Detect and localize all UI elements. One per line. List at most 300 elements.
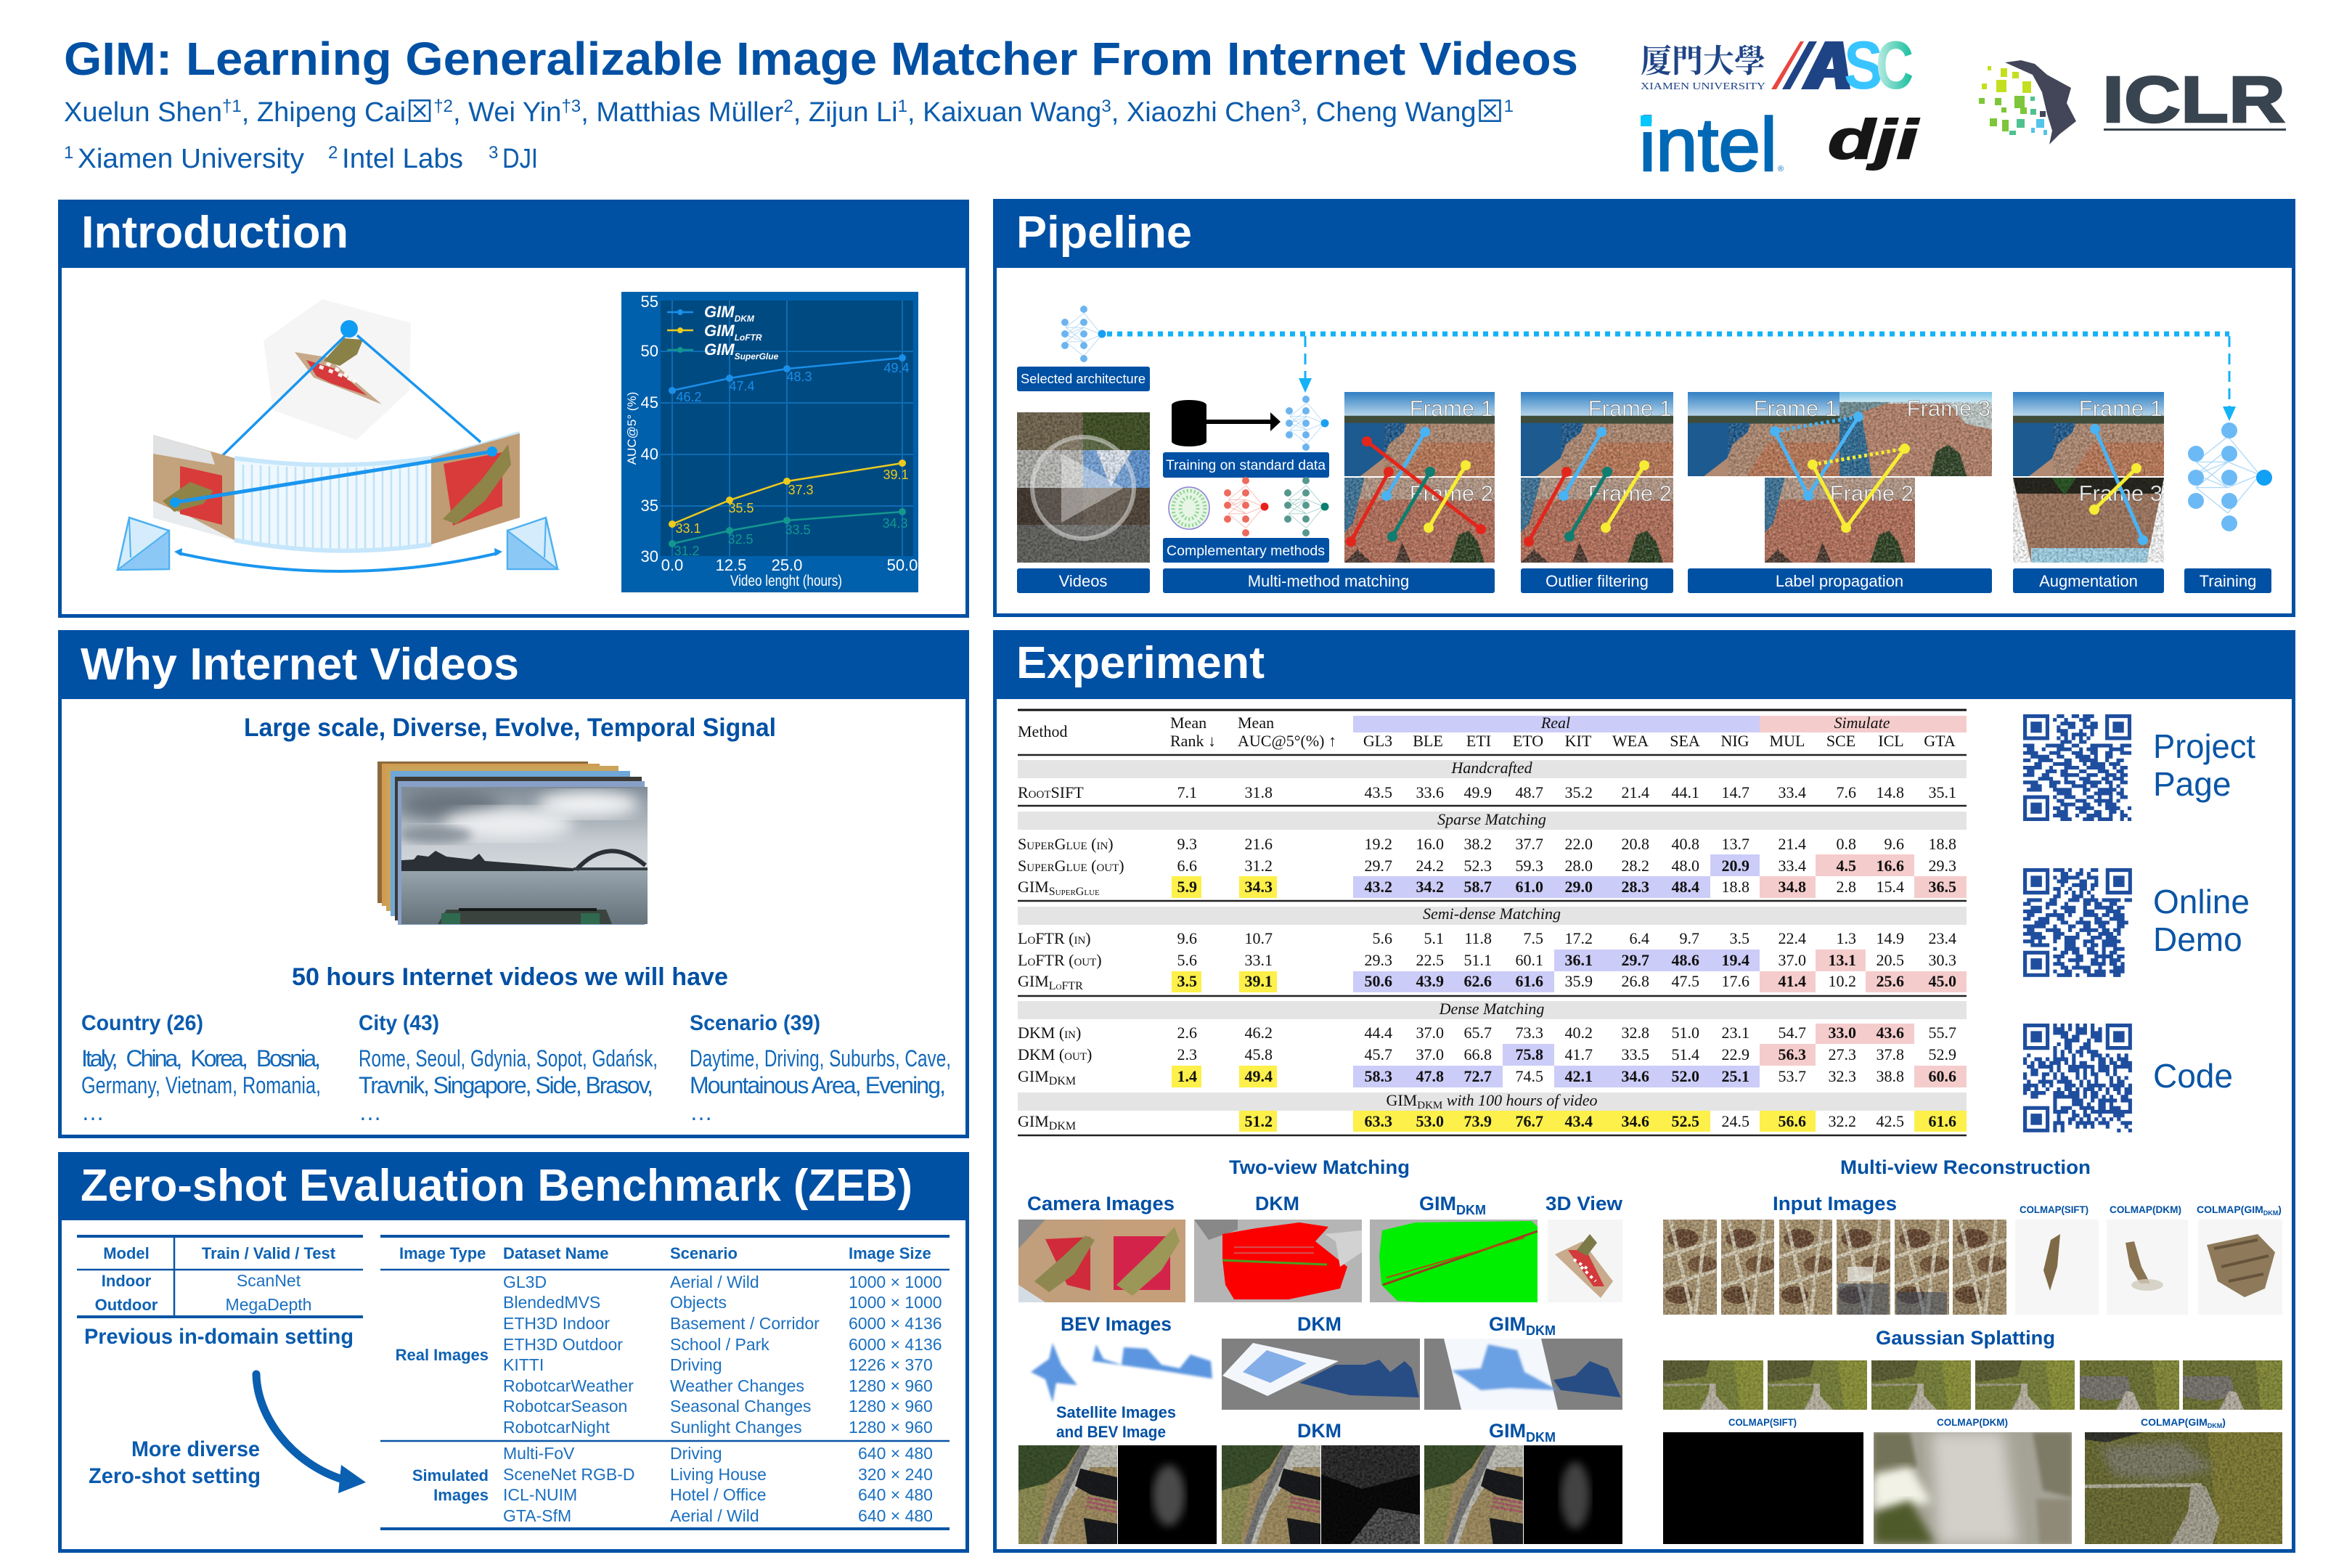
labels: Gaussian splatting methods: [1728, 1416, 2226, 1429]
image: BEV GIM DKM: [1424, 1339, 1622, 1410]
row: DKM out: 41.7: [1565, 1045, 1593, 1063]
row: SuperGlue out: 48.0: [1671, 857, 1699, 875]
row: RootSIFT: 44.1: [1671, 783, 1699, 801]
row: GIM SuperGlue: 28.3: [1622, 878, 1649, 896]
column: Country: Country (26): [81, 1011, 203, 1035]
line chart: AUC vs video length: 30: [641, 547, 658, 565]
table: datasets: Image Size: [849, 1244, 931, 1262]
row: GIM DKM: 58.3: [1365, 1067, 1392, 1085]
row: SuperGlue out: 16.6: [1876, 857, 1904, 875]
frames: augmentation: Frame 1: [2079, 396, 2163, 421]
row: DKM out: 37.8: [1876, 1045, 1904, 1063]
authors: , Cheng Wang⊠: [1301, 97, 1504, 128]
row: SuperGlue out: 6.6: [1177, 857, 1197, 875]
frames: outlier filtering: Frame 1: [1588, 396, 1672, 421]
column labels: BEV: DKM: [1526, 1323, 1556, 1338]
frames: label propagation: Frame 3: [1907, 396, 1990, 421]
table: datasets: 1000 × 1000: [849, 1293, 942, 1312]
logo: Intel: ®: [1778, 165, 1784, 173]
column labels: input images and COLMAP: COLMAP(DKM): [2110, 1204, 2181, 1215]
line chart: AUC vs video length: [621, 292, 918, 592]
series: GIM SuperGlue: 32.5: [727, 532, 754, 547]
row: GIM SuperGlue: SuperGlue: [1049, 886, 1100, 898]
row: SuperGlue in: [1018, 835, 1956, 853]
table: benchmark results: WEA: [1612, 732, 1649, 750]
column: Scenario: Daytime, Driving, Suburbs, Cave,: [690, 1045, 951, 1071]
stage labels: Training: [2200, 572, 2256, 590]
images: Gaussian splatting inputs: [1663, 1360, 2282, 1410]
row: GIM DKM: 49.4: [1244, 1067, 1273, 1085]
stage labels: Videos: [1059, 572, 1107, 590]
row: GIM SuperGlue: 34.8: [1779, 878, 1806, 896]
table: datasets: 640 × 480: [858, 1506, 933, 1525]
frames: label propagation: Frame 2: [1830, 481, 1914, 506]
row: GIM DKM: 34.6: [1622, 1067, 1649, 1085]
heading: Two-view Matching: Two-view Matching: [1229, 1156, 1410, 1178]
heading: Gaussian Splatting: Gaussian Splatting: [1876, 1327, 2055, 1349]
icon: selected architecture network: [1061, 306, 1106, 362]
authors: 1: [898, 97, 907, 116]
line chart: AUC vs video length: 35: [641, 497, 658, 515]
panel: Zero-shot Evaluation Benchmark: [58, 1152, 969, 1551]
row: RootSIFT: 35.1: [1928, 783, 1956, 801]
table: datasets: Multi-FoV: [503, 1444, 575, 1463]
row: GIM LoFTR: [1018, 972, 1956, 992]
column labels: satellite: DKM: [1297, 1420, 1342, 1442]
heading: Pipeline: Pipeline: [1016, 208, 1192, 258]
subheading: qualities: Large scale, Diverse, Evolve, Temporal Signal: [244, 714, 776, 742]
row: GIM DKM: 52.0: [1671, 1067, 1699, 1085]
stage labels: Label propagation: [1776, 572, 1903, 590]
row: GIM SuperGlue: 43.2: [1365, 878, 1392, 896]
line chart: AUC vs video length: Video lenght (hours): [730, 573, 842, 589]
table: previous in-domain setting: [77, 1236, 363, 1317]
row: LoFTR out: 60.1: [1516, 951, 1543, 969]
row: DKM in: 51.0: [1671, 1024, 1699, 1042]
row: DKM out: 75.8: [1516, 1045, 1543, 1063]
logo: ICLR head: [1979, 60, 2076, 144]
row: GIM SuperGlue: 2.8: [1837, 878, 1856, 896]
row: DKM in: 23.1: [1722, 1024, 1749, 1042]
row: DKM in: 65.7: [1463, 1024, 1492, 1042]
QR code: online demo: [2023, 868, 2132, 977]
affiliations: [64, 143, 538, 174]
label: Selected architecture: [1017, 367, 1150, 391]
row: LoFTR in: 22.4: [1779, 929, 1806, 947]
icon: network on standard data: [1286, 396, 1328, 451]
table: benchmark results: Sparse Matching: [1437, 810, 1546, 828]
link label: Online Demo: Demo: [2153, 920, 2242, 958]
QR code: code: [2023, 1024, 2132, 1132]
table: benchmark results: with 100 hours of video: [1442, 1091, 1598, 1109]
table: previous in-domain setting: MegaDepth: [226, 1295, 311, 1314]
column: Country: Germany, Vietnam, Romania,: [81, 1072, 321, 1098]
authors: , Kaixuan Wang: [907, 97, 1101, 128]
image: satellite input: [1018, 1445, 1217, 1544]
row: SuperGlue in: 16.0: [1416, 835, 1444, 853]
table: datasets: Objects: [670, 1293, 727, 1312]
line chart: AUC vs video length: 50.0: [887, 556, 918, 574]
row: GIM LoFTR: 26.8: [1622, 972, 1649, 990]
row: RootSIFT: 35.2: [1565, 783, 1593, 801]
link label: Project Page: Page: [2153, 765, 2231, 803]
column: City: Rome, Seoul, Gdynia, Sopot, Gdańsk,: [359, 1045, 658, 1071]
row: LoFTR in: 9.6: [1177, 929, 1197, 947]
row: GIM DKM 100 hours: 43.4: [1565, 1112, 1593, 1130]
row: LoFTR out: [1018, 951, 1956, 969]
column labels: satellite: GIM: [1489, 1420, 1526, 1442]
row: GIM DKM 100 hours: 42.5: [1876, 1112, 1904, 1130]
labels: Gaussian splatting methods: DKM: [2208, 1422, 2222, 1429]
column: City: [359, 1011, 658, 1125]
line chart: AUC vs video length: 0.0: [661, 556, 683, 574]
row: SuperGlue in: 22.0: [1565, 835, 1593, 853]
table: previous in-domain setting: Outdoor: [95, 1296, 158, 1314]
table: datasets: ICL-NUIM: [503, 1485, 577, 1504]
row: LoFTR in: 5.1: [1424, 929, 1444, 947]
authors: Xuelun Shen: [64, 97, 222, 128]
chart legend: [667, 303, 779, 362]
table: datasets: Hotel / Office: [670, 1485, 767, 1504]
table: datasets: GL3D: [503, 1273, 547, 1291]
row: LoFTR in: 17.2: [1565, 929, 1593, 947]
row: SuperGlue out: 31.2: [1244, 857, 1273, 875]
row: SuperGlue in: 18.8: [1928, 835, 1956, 853]
affiliations: Xiamen University: [78, 144, 304, 174]
series: GIM DKM: 47.4: [729, 379, 755, 393]
table: previous in-domain setting: Train / Valid / Test: [202, 1244, 336, 1262]
table: datasets: Simulated: [412, 1466, 489, 1485]
labels: Gaussian splatting methods: ): [2222, 1416, 2226, 1428]
row: GIM LoFTR: 3.5: [1177, 972, 1197, 990]
row: GIM SuperGlue: 48.4: [1671, 878, 1699, 896]
row: GIM LoFTR: 17.6: [1722, 972, 1749, 990]
images: Sistine ceiling inputs: [1663, 1220, 2006, 1315]
table: benchmark results: Real: [1540, 714, 1570, 732]
row: GIM DKM: GIM: [1018, 1067, 1049, 1085]
row: RootSIFT: 33.4: [1779, 783, 1806, 801]
label: Training on standard data: [1163, 452, 1329, 478]
heading: Why Internet Videos: Why Internet Videos: [81, 640, 519, 690]
line chart: AUC vs video length: 45: [641, 393, 658, 412]
row: GIM DKM: 25.1: [1722, 1067, 1749, 1085]
row: RootSIFT: 21.4: [1622, 783, 1649, 801]
row: DKM out: 22.9: [1722, 1045, 1749, 1063]
authors: 3: [1101, 97, 1111, 116]
label: Selected architecture: Selected architecture: [1021, 372, 1146, 386]
table: benchmark results: AUC@5°(%) ↑: [1238, 732, 1336, 750]
row: LoFTR in: 1.3: [1837, 929, 1856, 947]
column: City: …: [359, 1099, 382, 1125]
column labels: input images and COLMAP: Input Images: [1773, 1193, 1897, 1214]
row: LoFTR out: 33.1: [1244, 951, 1273, 969]
row: SuperGlue in: 13.7: [1722, 835, 1749, 853]
row: SuperGlue out: SuperGlue (out): [1018, 857, 1124, 875]
row: SuperGlue in: SuperGlue (in): [1018, 835, 1114, 853]
stage labels: Augmentation: [2039, 572, 2138, 590]
row: GIM LoFTR: 62.6: [1463, 972, 1492, 990]
row: GIM DKM 100 hours: DKM: [1049, 1120, 1076, 1132]
authors: , Zijun Li: [793, 97, 898, 128]
authors: 1: [1504, 97, 1514, 116]
image: satellite GIM DKM: [1424, 1445, 1622, 1544]
row: LoFTR in: 3.5: [1729, 929, 1749, 947]
table: datasets: Real Images: [396, 1346, 489, 1364]
row: RootSIFT: 7.6: [1837, 783, 1856, 801]
table: benchmark results: Rank ↓: [1170, 732, 1216, 750]
frames: outlier filtering: [1521, 392, 1673, 563]
row: DKM in: DKM (in): [1018, 1024, 1081, 1042]
frames: multi-method matching: Frame 2: [1410, 481, 1493, 506]
series: GIM LoFTR: 37.3: [788, 483, 814, 497]
row: LoFTR out: 20.5: [1876, 951, 1904, 969]
row: GIM LoFTR: LoFTR: [1049, 980, 1083, 992]
table: benchmark results: BLE: [1413, 732, 1443, 750]
row: LoFTR in: 23.4: [1928, 929, 1956, 947]
column labels: satellite: DKM: [1526, 1430, 1556, 1445]
row: GIM DKM 100 hours: 56.6: [1779, 1112, 1806, 1130]
panel: Introduction: [58, 200, 969, 616]
frames: multi-method matching: Frame 1: [1410, 396, 1493, 421]
series: GIM LoFTR: 33.1: [675, 521, 701, 536]
column labels: BEV: BEV Images: [1061, 1313, 1172, 1335]
row: LoFTR out: 19.4: [1722, 951, 1749, 969]
table: datasets: GTA-SfM: [503, 1506, 571, 1525]
row: LoFTR out: 37.0: [1779, 951, 1806, 969]
row: GIM DKM: 53.7: [1779, 1067, 1806, 1085]
arrow: to zero-shot setting: [256, 1374, 366, 1493]
authors: , Wei Yin: [453, 97, 561, 128]
row: SuperGlue out: 29.7: [1365, 857, 1392, 875]
logo: ASC: [1771, 27, 1914, 103]
column: Scenario: [690, 1011, 951, 1125]
image: COLMAP SIFT render: [1663, 1432, 1863, 1544]
table: benchmark results: Semi-dense Matching: [1423, 905, 1561, 923]
row: DKM in: 43.6: [1876, 1024, 1904, 1042]
row: GIM SuperGlue: 34.2: [1416, 878, 1444, 896]
row: GIM DKM 100 hours: GIM: [1018, 1112, 1049, 1130]
panel: Pipeline: [993, 199, 2295, 616]
row: GIM SuperGlue: 36.5: [1928, 878, 1956, 896]
row: GIM SuperGlue: 34.3: [1244, 878, 1273, 896]
table: datasets: RobotcarSeason: [503, 1397, 627, 1416]
table: benchmark results: Method: [1018, 722, 1067, 740]
table: benchmark results: KIT: [1565, 732, 1592, 750]
row: SuperGlue out: 33.4: [1779, 857, 1806, 875]
row: SuperGlue out: 52.3: [1463, 857, 1492, 875]
row: DKM out: [1018, 1045, 1956, 1063]
row: SuperGlue in: 0.8: [1837, 835, 1856, 853]
images: COLMAP reconstructions: [2015, 1220, 2282, 1315]
affiliations: 3: [489, 143, 498, 163]
series: GIM SuperGlue: 31.2: [674, 544, 700, 558]
authors: , Xiaozhi Chen: [1111, 97, 1291, 128]
caption: more diverse zero-shot setting: [89, 1437, 261, 1488]
labels: Gaussian splatting methods: COLMAP(DKM): [1937, 1416, 2008, 1428]
column labels: input images and COLMAP: COLMAP(SIFT): [2020, 1204, 2088, 1215]
affiliations: 1: [64, 143, 73, 163]
image: camera pair: [1018, 1220, 1185, 1302]
table: benchmark results: Handcrafted: [1450, 759, 1533, 777]
row: LoFTR out: 51.1: [1463, 951, 1492, 969]
row: LoFTR out: 22.5: [1416, 951, 1444, 969]
row: DKM in: 46.2: [1244, 1024, 1273, 1042]
table cell highlights: [1018, 716, 1967, 1132]
row: GIM LoFTR: 39.1: [1244, 972, 1273, 990]
chart legend: DKM: [735, 314, 755, 324]
row: RootSIFT: 7.1: [1177, 783, 1197, 801]
row: GIM DKM: DKM: [1049, 1075, 1076, 1087]
label: Training on standard data: Training on standard data: [1166, 458, 1326, 473]
table: datasets: 320 × 240: [858, 1465, 933, 1484]
link label: Online Demo: [2153, 883, 2250, 958]
row: LoFTR in: 11.8: [1464, 929, 1492, 947]
stage labels: Outlier filtering: [1545, 572, 1649, 590]
row: LoFTR out: 5.6: [1177, 951, 1197, 969]
table: benchmark results: DKM: [1417, 1100, 1442, 1111]
row: DKM in: 54.7: [1779, 1024, 1806, 1042]
row: DKM out: 56.3: [1779, 1045, 1806, 1063]
table: datasets: BlendedMVS: [503, 1293, 600, 1312]
row: GIM DKM: 32.3: [1828, 1067, 1856, 1085]
series: GIM LoFTR: [669, 460, 909, 536]
authors: †3: [561, 97, 581, 116]
table: benchmark results: GTA: [1924, 732, 1956, 750]
row: GIM LoFTR: 35.9: [1565, 972, 1593, 990]
logo: ASC: C: [1876, 27, 1914, 103]
labels: Gaussian splatting methods: COLMAP(SIFT): [1728, 1416, 1797, 1428]
chart legend: SuperGlue: [735, 351, 779, 362]
icon: teal network: [1284, 477, 1328, 536]
row: RootSIFT: 14.8: [1876, 783, 1904, 801]
row: DKM in: 32.8: [1622, 1024, 1649, 1042]
column labels: BEV: GIM: [1489, 1313, 1526, 1335]
chart legend: LoFTR: [735, 332, 762, 343]
row: RootSIFT: 14.7: [1722, 783, 1749, 801]
stage labels: [1017, 568, 2271, 593]
row: SuperGlue out: [1018, 857, 1956, 875]
row: GIM DKM 100 hours: 53.0: [1416, 1112, 1444, 1130]
row: GIM LoFTR: 10.2: [1828, 972, 1856, 990]
row: GIM DKM: 1.4: [1177, 1067, 1197, 1085]
table: datasets: RobotcarWeather: [503, 1376, 634, 1395]
row: GIM DKM 100 hours: 32.2: [1828, 1112, 1856, 1130]
table: datasets: 1280 × 960: [849, 1418, 933, 1437]
column labels: input images and COLMAP: COLMAP(GIM: [2197, 1204, 2263, 1215]
title: GIM: Learning Generalizable Image Matcher From Internet Videos: [64, 33, 1578, 85]
row: SuperGlue out: 24.2: [1416, 857, 1444, 875]
caption: previous in-domain setting: Previous in-domain setting: [84, 1325, 354, 1349]
row: DKM in: 40.2: [1565, 1024, 1593, 1042]
panel: Experiment: [993, 630, 2295, 1551]
row: LoFTR in: 14.9: [1876, 929, 1904, 947]
table: datasets: 1280 × 960: [849, 1397, 933, 1416]
row: GIM DKM: 38.8: [1876, 1067, 1904, 1085]
logo: Xiamen University: XIAMEN UNIVERSITY: [1641, 81, 1765, 92]
frames: augmentation: [2013, 392, 2164, 563]
row: SuperGlue out: 20.9: [1722, 857, 1749, 875]
authors: 2: [783, 97, 793, 116]
table: datasets: 1280 × 960: [849, 1376, 933, 1395]
row: GIM DKM: 74.5: [1516, 1067, 1543, 1085]
column labels: two-view row 1: DKM: [1255, 1193, 1299, 1214]
image: BEV input: [1031, 1343, 1212, 1402]
row: DKM in: 2.6: [1177, 1024, 1197, 1042]
row: GIM DKM 100 hours: 76.7: [1516, 1112, 1543, 1130]
row: SuperGlue in: 40.8: [1671, 835, 1699, 853]
frames: multi-method matching: [1344, 392, 1495, 563]
image: 3D view: [1548, 1220, 1622, 1302]
row: DKM in: 73.3: [1516, 1024, 1543, 1042]
logo: DJI: dji: [1828, 109, 1920, 171]
row: DKM out: 2.3: [1177, 1045, 1197, 1063]
table: datasets: RobotcarNight: [503, 1418, 611, 1437]
row: DKM out: 33.5: [1622, 1045, 1649, 1063]
image: COLMAP DKM render: [1874, 1432, 2072, 1544]
row: GIM DKM 100 hours: 61.6: [1928, 1112, 1956, 1130]
table: datasets: Sunlight Changes: [670, 1418, 802, 1437]
row: GIM LoFTR: 50.6: [1365, 972, 1392, 990]
icon: training network: [2188, 422, 2272, 531]
table: benchmark results: ICL: [1878, 732, 1904, 750]
row: DKM out: 45.7: [1365, 1045, 1392, 1063]
column labels: satellite: [1056, 1403, 1556, 1445]
row: GIM DKM 100 hours: 73.9: [1463, 1112, 1492, 1130]
row: SuperGlue in: 21.6: [1244, 835, 1273, 853]
row: GIM SuperGlue: [1018, 878, 1956, 898]
label: Complementary methods: Complementary methods: [1167, 544, 1325, 559]
icon: red network: [1224, 477, 1269, 536]
row: LoFTR out: 48.6: [1671, 951, 1699, 969]
row: LoFTR in: 7.5: [1523, 929, 1543, 947]
row: LoFTR out: 29.7: [1622, 951, 1649, 969]
table: datasets: Aerial / Wild: [670, 1273, 759, 1291]
logo: ICLR wordmark: ICLR: [2102, 64, 2285, 136]
row: SuperGlue out: 28.2: [1622, 857, 1649, 875]
table: datasets: SceneNet RGB-D: [503, 1465, 635, 1484]
row: DKM in: [1018, 1024, 1956, 1042]
table: datasets: Basement / Corridor: [670, 1314, 820, 1333]
logo: Xiamen University: 厦門大學: [1641, 35, 1765, 81]
table: datasets: Seasonal Changes: [670, 1397, 811, 1416]
heading: Experiment: Experiment: [1016, 638, 1265, 688]
table: datasets: Image Type: [399, 1244, 486, 1262]
row: SuperGlue in: 37.7: [1516, 835, 1543, 853]
column labels: two-view row 1: DKM: [1456, 1203, 1486, 1217]
row: GIM LoFTR: 41.4: [1779, 972, 1806, 990]
table: benchmark results: NIG: [1720, 732, 1749, 750]
row: SuperGlue out: 29.3: [1928, 857, 1956, 875]
row: GIM DKM 100 hours: 34.6: [1622, 1112, 1649, 1130]
row: GIM DKM 100 hours: 63.3: [1365, 1112, 1392, 1130]
icon: point ellipse: [1169, 487, 1209, 529]
column labels: two-view row 1: GIM: [1419, 1193, 1456, 1214]
series: GIM DKM: 46.2: [676, 390, 702, 404]
column labels: two-view row 1: [1027, 1193, 1623, 1217]
affiliations: DJI: [502, 144, 538, 174]
frames: label propagation: [1688, 392, 1992, 563]
row: LoFTR in: [1018, 929, 1956, 947]
heading: Multi-view Reconstruction: Multi-view Reconstruction: [1840, 1156, 2091, 1178]
column labels: two-view row 1: 3D View: [1545, 1193, 1623, 1214]
column labels: satellite: Satellite Images: [1056, 1403, 1176, 1421]
line chart: AUC vs video length: 55: [641, 293, 658, 311]
image: GIM DKM matches: [1370, 1220, 1538, 1302]
row: RootSIFT: 48.7: [1516, 783, 1543, 801]
table: datasets: Dataset Name: [503, 1244, 609, 1262]
row: DKM in: 55.7: [1928, 1024, 1956, 1042]
row: GIM DKM: 72.7: [1463, 1067, 1492, 1085]
